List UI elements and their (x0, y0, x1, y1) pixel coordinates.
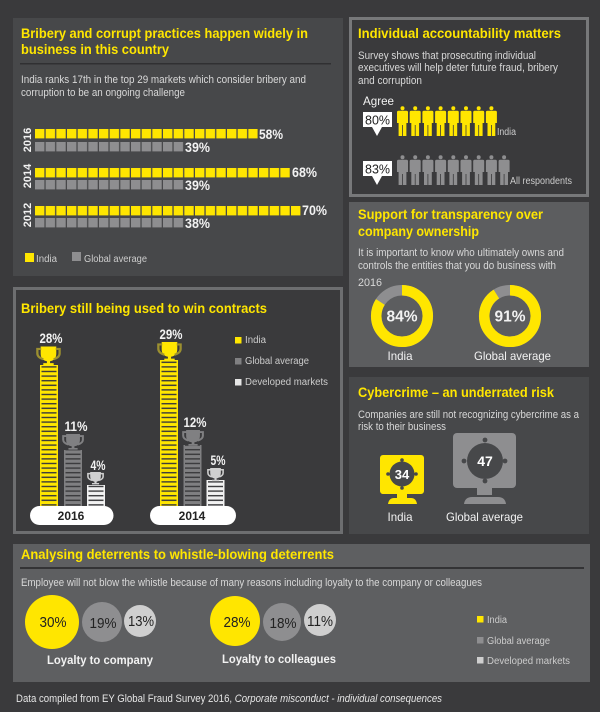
text: it is important: It is important to know who ultimately owns and (358, 247, 564, 259)
text: India ranks 17th (21, 74, 306, 99)
heading: support for transparency: Support for transparency over (358, 207, 544, 222)
chart: 2014 trophy bars: 5% (210, 453, 226, 468)
legend: India and global average: India (36, 254, 57, 265)
chart: loyalty to company circles: 30% (40, 614, 66, 631)
icon: India monitor 34: 34 (395, 467, 410, 482)
chart: global average donut 91%: 91% (494, 308, 526, 326)
chart: 2016 trophy bars: 28% (40, 331, 62, 346)
panel: support for transparency (349, 202, 589, 367)
chart: 2016 bars: 58% (259, 127, 283, 142)
text: it is important: controls the entities that you do business with (358, 260, 556, 272)
icon: global monitor 47 (453, 433, 516, 504)
heading: bribery to win contracts: Bribery still being used to win contracts (21, 301, 267, 316)
legend: contracts: India (245, 335, 266, 346)
label: India: India (388, 349, 413, 363)
heading: bribery and corrupt practices: Bribery and corrupt practices happen widely in (21, 26, 308, 41)
chart: 2012 bars (22, 203, 327, 231)
panel: bribery and corrupt practices (13, 18, 343, 276)
callout: 83% (363, 161, 392, 185)
footer source note: Data compiled from EY Global Fraud Survey 2016, Corporate misconduct - individual consequences (16, 693, 442, 705)
chart: loyalty to company circles (25, 595, 156, 649)
legend: India and global average: Global average (84, 254, 147, 265)
icon: global monitor 47: 47 (477, 453, 493, 469)
label: India: India (388, 510, 413, 524)
text: India ranks 17th: corruption to be an ongoing challenge (21, 87, 185, 99)
chart: 2014 bars: 39% (185, 178, 210, 193)
icons: all respondents people (397, 155, 510, 185)
heading: bribery and corrupt practices (21, 26, 308, 57)
chart: India donut 84% (376, 290, 428, 342)
legend: contracts: Global average (245, 356, 309, 367)
icon: India monitor 34 (380, 455, 424, 504)
chart: 2012 bars: 38% (185, 216, 210, 231)
chart: loyalty to colleagues circles (210, 596, 336, 646)
text: survey shows: Survey shows that prosecuting individual (358, 50, 536, 62)
legend: contracts (235, 335, 328, 388)
heading: support for transparency: company ownership (358, 224, 479, 239)
text: survey shows (358, 50, 558, 87)
callout: 80% (363, 112, 392, 136)
chart: 2014 bars: 2014 (22, 163, 34, 188)
label: India: India (497, 127, 516, 138)
callout: 80%: 80% (365, 114, 390, 128)
chart: loyalty to company circles: 13% (128, 613, 154, 630)
label: loyalty to colleagues: Loyalty to colleagues (222, 652, 336, 666)
text: survey shows: and corruption (358, 75, 422, 87)
legend: India and global average (25, 252, 147, 265)
chart: 2014 bars: 68% (292, 165, 317, 180)
chart: 2012 bars: 2012 (22, 203, 34, 227)
text: survey shows: executives will help deter future fraud, bribery (358, 62, 558, 74)
chart: India donut 84%: 84% (386, 308, 418, 326)
legend: whistle-blowing: Global average (487, 636, 550, 647)
chart: loyalty to colleagues circles: 28% (224, 614, 250, 631)
label: global average: Global average (446, 510, 523, 524)
chart: 2014 trophy bars: 29% (160, 327, 182, 342)
label: agree: Agree (363, 94, 394, 108)
label: global average: Global average (474, 349, 551, 363)
text: it is important: 2016 (358, 277, 382, 289)
text: companies: risk to their business (358, 421, 446, 433)
chart: loyalty to company circles: 19% (90, 615, 116, 632)
heading: support for transparency (358, 207, 544, 239)
panel: whistle-blowing deterrents (13, 544, 590, 682)
chart: 2016 bars: 2016 (22, 128, 34, 152)
chart: 2014 trophy bars: 12% (184, 415, 206, 430)
chart: 2014 trophy bars: 2014 (179, 509, 206, 523)
text: India ranks 17th: India ranks 17th in the top 29 markets which consider bribery and (21, 74, 306, 86)
chart: 2014 bars (22, 163, 317, 193)
text: companies (358, 409, 580, 433)
chart: 2016 bars: 39% (185, 140, 210, 155)
text: employee: Employee will not blow the whistle because of many reasons including loyalty to the company or colleagues (21, 577, 482, 589)
heading: cybercrime: Cybercrime – an underrated risk (358, 385, 554, 400)
text: it is important (358, 247, 564, 289)
chart: loyalty to colleagues circles: 18% (270, 615, 296, 632)
panel: individual accountability (350, 18, 588, 196)
chart: 2012 bars: 70% (302, 203, 327, 218)
label: all respondents: All respondents (510, 176, 572, 187)
legend: whistle-blowing: Developed markets (487, 656, 570, 667)
heading: individual accountability: Individual accountability matters (358, 26, 561, 41)
heading: whistle-blowing deterrents: Analysing deterrents to whistle-blowing deterrents (21, 547, 334, 562)
chart: 2016 bars (22, 127, 283, 155)
chart: 2014 trophy bars (150, 327, 236, 525)
legend: contracts: Developed markets (245, 377, 328, 388)
panel: cybercrime (349, 377, 589, 534)
chart: 2016 trophy bars (30, 331, 114, 525)
legend: whistle-blowing: India (487, 615, 507, 626)
panel: bribery to win contracts (14, 288, 342, 532)
legend: whistle-blowing (477, 615, 570, 667)
chart: global average donut 91% (484, 290, 536, 342)
chart: 2016 trophy bars: 4% (90, 458, 106, 473)
chart: 2016 trophy bars: 2016 (58, 509, 85, 523)
icons: India people (397, 106, 497, 136)
heading: bribery and corrupt practices: business in this country (21, 42, 169, 57)
label: loyalty to company: Loyalty to company (47, 653, 153, 667)
chart: 2016 trophy bars: 11% (64, 419, 88, 434)
chart: loyalty to colleagues circles: 11% (307, 613, 333, 630)
callout: 83%: 83% (365, 162, 390, 176)
